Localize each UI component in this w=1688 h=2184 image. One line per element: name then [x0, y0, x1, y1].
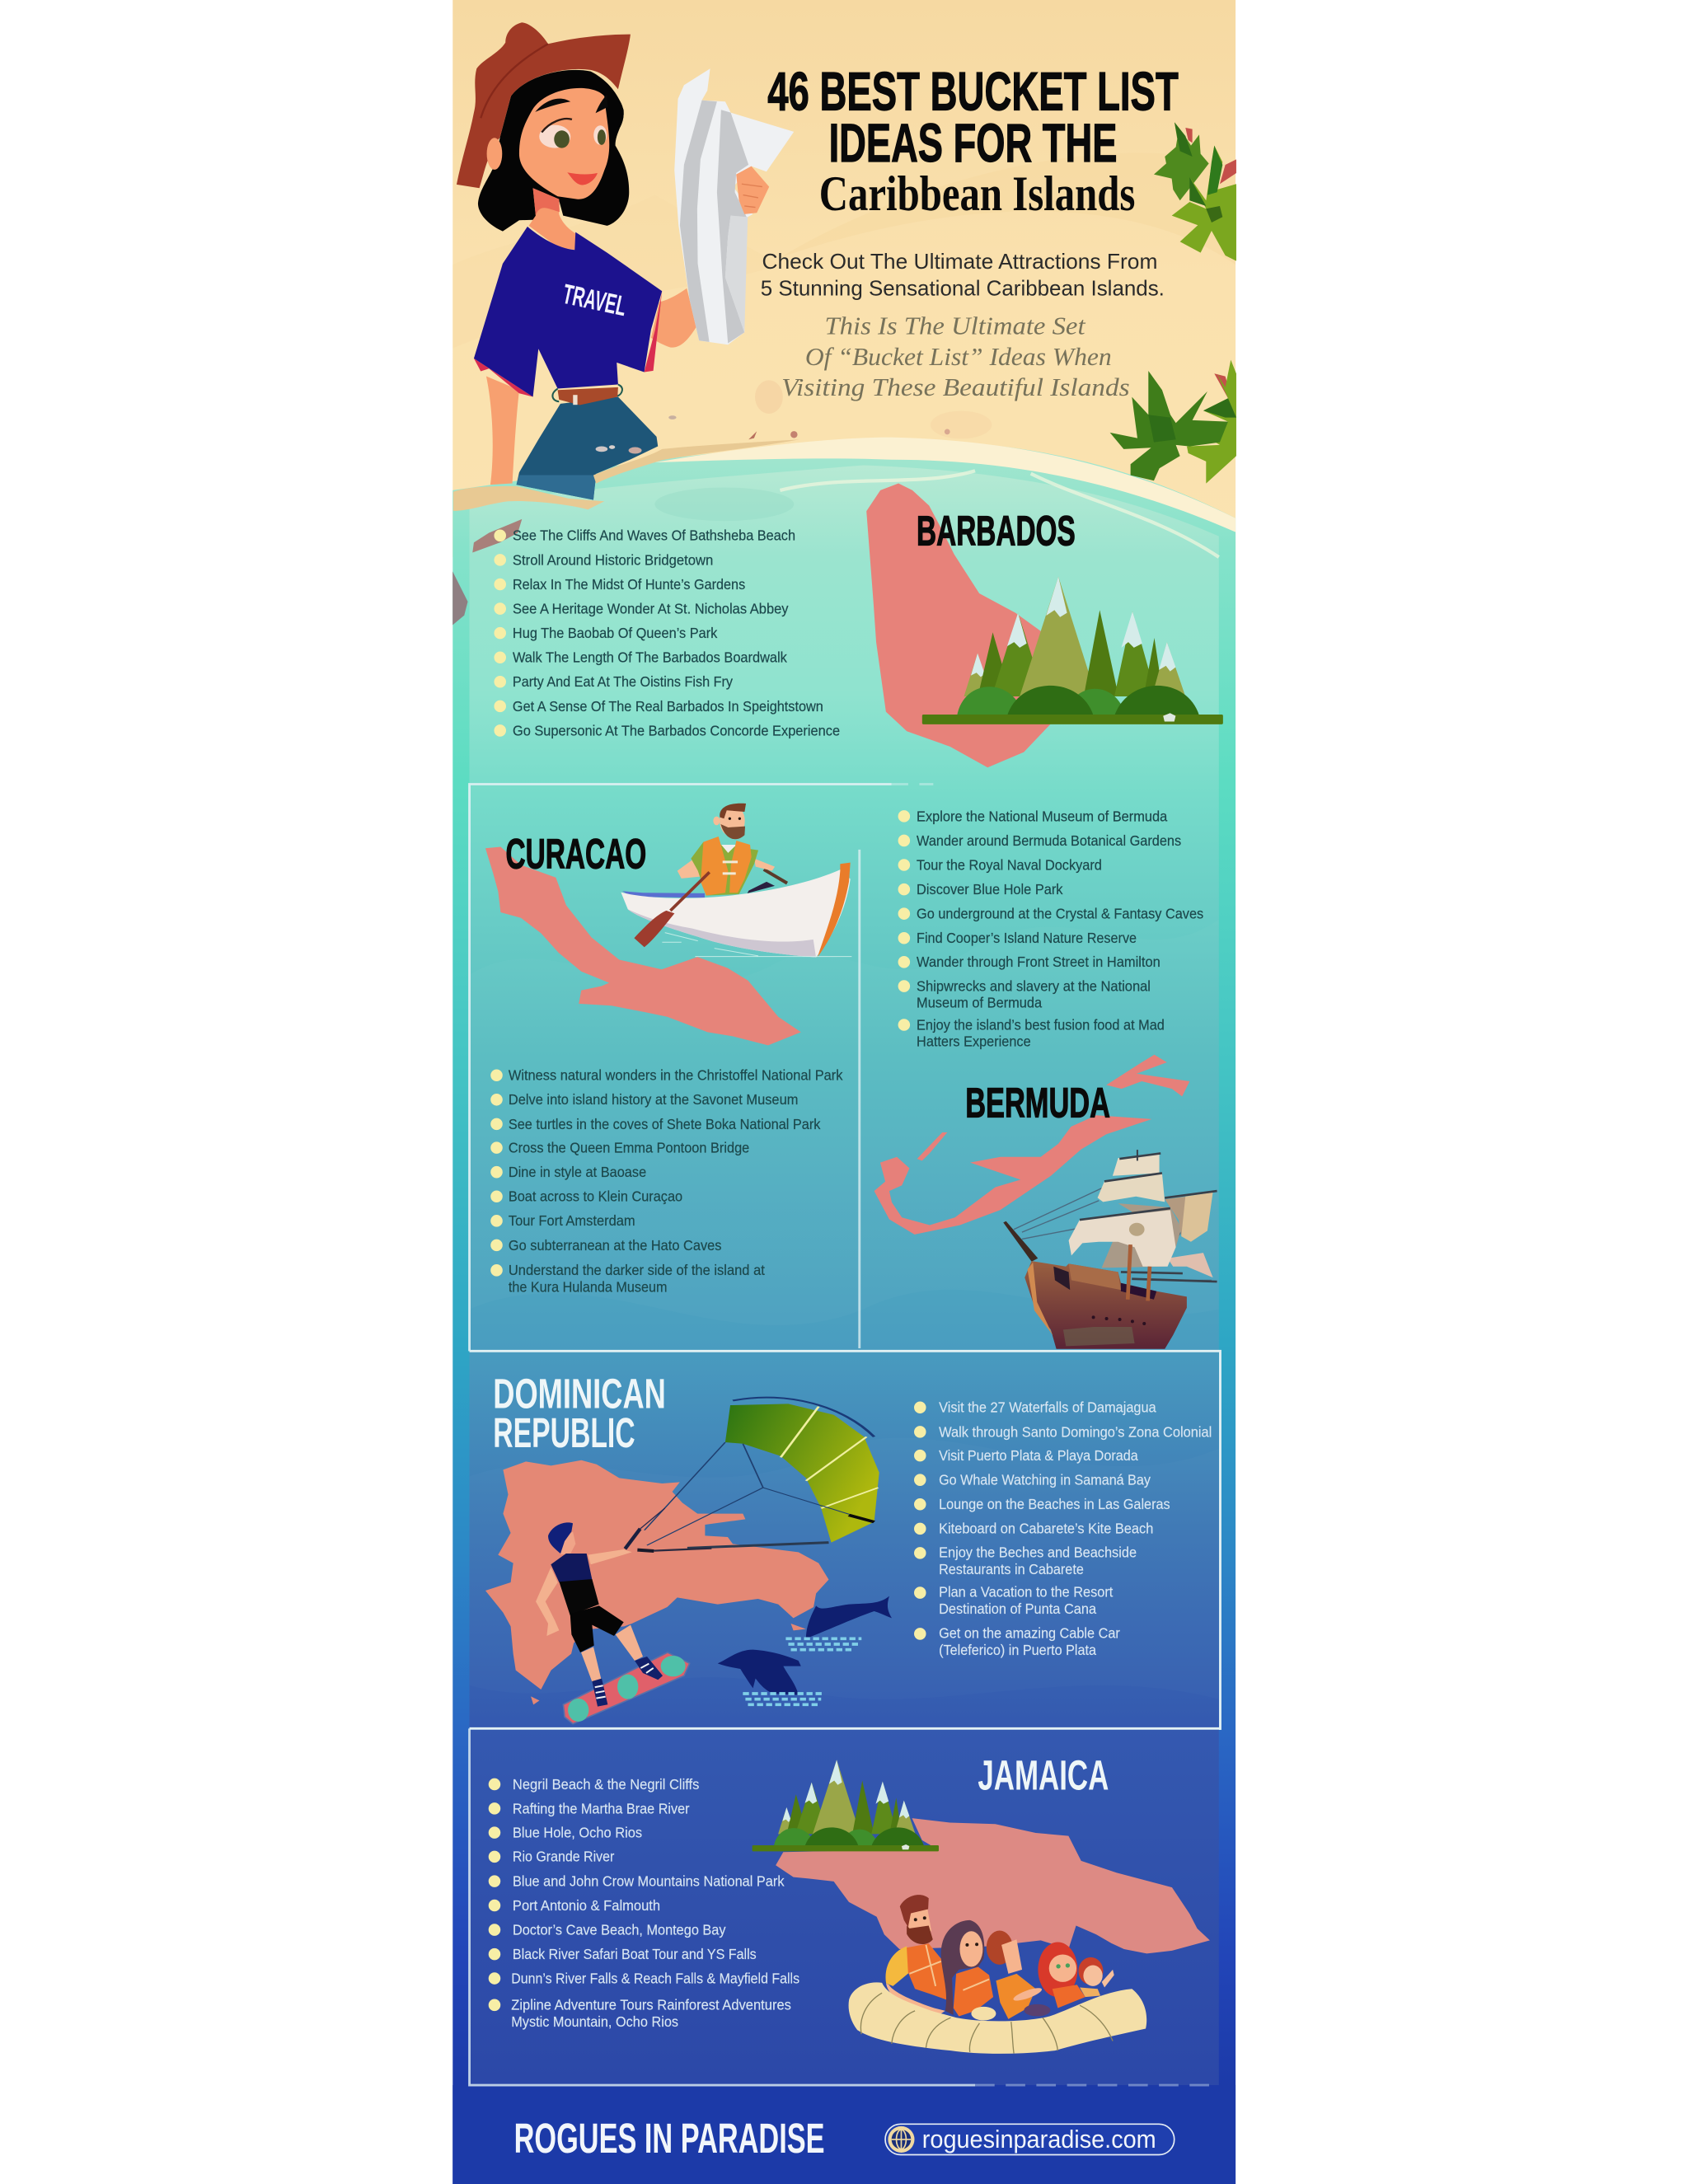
list: Curacao attractions: Witness natural wonders in the Christoffel National Park [509, 1067, 843, 1084]
skirt [517, 397, 658, 500]
list: Curacao attractions: Go subterranean at the Hato Caves [509, 1237, 722, 1254]
list: Curacao attractions: See turtles in the coves of Shete Boka National Park [509, 1116, 821, 1132]
sleeve linings [474, 359, 533, 397]
woman traveller illustration [457, 22, 794, 500]
list: Barbados attractions [494, 527, 840, 738]
icon: globe [888, 2126, 915, 2153]
heading: Barbados: BARBADOS [917, 508, 1076, 555]
hull [621, 869, 851, 958]
list: Barbados attractions: Hug The Baobab Of Queen’s Park [513, 625, 717, 641]
bowsprit [1003, 1221, 1038, 1262]
heading: Curacao: CURACAO [505, 831, 646, 878]
palm leaves: lower right [1110, 360, 1236, 484]
list: Bermuda attractions: Explore the National Museum of Bermuda [917, 808, 1167, 824]
list: Jamaica attractions: Rio Grande River [513, 1849, 614, 1865]
belt [558, 387, 618, 405]
list: Jamaica attractions: Mystic Mountain, Ocho Rios [511, 2013, 678, 2030]
handwritten tagline: Of “Bucket List” Ideas When [805, 343, 1112, 371]
rock at left edge [452, 571, 468, 625]
list: Bermuda attractions: Wander through Front Street in Hamilton [917, 954, 1160, 970]
panel background [452, 0, 1236, 2184]
board [563, 1652, 690, 1724]
map: Barbados [866, 483, 1050, 767]
raft [849, 1982, 1146, 2054]
kite [645, 1398, 879, 1548]
rear sails [1102, 1203, 1181, 1268]
list: Barbados attractions: Party And Eat At The Oistins Fish Fry [513, 673, 733, 690]
list: Barbados attractions: Go Supersonic At The Barbados Concorde Experience [513, 722, 840, 738]
title: Caribbean Islands [819, 166, 1135, 222]
shirt label: TRAVEL [560, 279, 629, 322]
water lines [662, 933, 851, 957]
subtitle: Check Out The Ultimate Attractions From [762, 249, 1157, 274]
masts [1128, 1244, 1150, 1301]
arms [588, 1549, 632, 1564]
list: Dominican Republic attractions: Plan a Vacation to the Resort [939, 1584, 1113, 1601]
rigging [1014, 1188, 1212, 1280]
shoes [592, 1679, 607, 1707]
list: Jamaica attractions: Negril Beach & the Negril Cliffs [513, 1776, 700, 1793]
list: Dominican Republic attractions: Enjoy the Beches and Beachside [939, 1544, 1137, 1560]
list: Curacao attractions [490, 1067, 843, 1296]
list: Barbados attractions: Get A Sense Of The Real Barbados In Speightstown [513, 698, 823, 715]
footer website pill: roguesinparadise.com [922, 2125, 1156, 2154]
title: 46 BEST BUCKET LIST [767, 61, 1179, 122]
hand [736, 166, 769, 214]
list: Curacao attractions: the Kura Hulanda Museum [509, 1279, 668, 1296]
list: Jamaica attractions: Zipline Adventure Tours Rainforest Adventures [511, 1997, 791, 2013]
neck [529, 188, 575, 250]
list: Barbados attractions: Stroll Around Historic Bridgetown [513, 551, 713, 568]
list: Bermuda attractions: Enjoy the island’s best fusion food at Mad [917, 1016, 1165, 1033]
dolphins [718, 1596, 892, 1704]
subtitle: 5 Stunning Sensational Caribbean Islands. [761, 275, 1165, 300]
list: Dominican Republic attractions: Kiteboard on Cabarete’s Kite Beach [939, 1521, 1153, 1537]
hull [1025, 1261, 1187, 1349]
list: Barbados attractions: See The Cliffs And Waves Of Bathsheba Beach [513, 527, 795, 544]
list: Bermuda attractions: Go underground at the Crystal & Fantasy Caves [917, 906, 1203, 922]
top sails [1113, 1154, 1160, 1176]
arms [678, 860, 719, 879]
boy [987, 1931, 1013, 1965]
list: Bermuda attractions [898, 808, 1203, 1050]
face [519, 88, 609, 199]
section frames [470, 784, 1220, 2085]
rocks left of Barbados list [472, 519, 522, 553]
paddle [670, 872, 710, 911]
list: Dominican Republic attractions [914, 1399, 1212, 1658]
list: Dominican Republic attractions: Visit Puerto Plata & Playa Dorada [939, 1447, 1138, 1464]
list: Jamaica attractions: Blue Hole, Ocho Rios [513, 1825, 642, 1841]
mountains: Jamaica [753, 1760, 939, 1851]
list: Jamaica attractions: Blue and John Crow Mountains National Park [513, 1872, 785, 1889]
list: Jamaica attractions: Doctor’s Cave Beach, Montego Bay [513, 1921, 726, 1938]
handwritten tagline: This Is The Ultimate Set [825, 312, 1086, 340]
map: Bermuda [874, 1055, 1189, 1235]
list: Jamaica attractions: Rafting the Martha Brae River [513, 1800, 690, 1816]
wet sand shoreline [453, 415, 799, 511]
heading: Bermuda: BERMUDA [965, 1079, 1110, 1126]
list: Curacao attractions: Dine in style at Baoase [509, 1164, 646, 1180]
title: IDEAS FOR THE [829, 112, 1117, 173]
list: Dominican Republic attractions: Lounge on the Beaches in Las Galeras [939, 1496, 1170, 1512]
list: Curacao attractions: Understand the darker side of the island at [509, 1262, 765, 1278]
list: Dominican Republic attractions: Visit the 27 Waterfalls of Damajagua [939, 1399, 1156, 1416]
title [767, 61, 1179, 222]
list: Bermuda attractions: Discover Blue Hole Park [917, 881, 1063, 898]
hat [457, 22, 631, 188]
map: Curacao [485, 847, 801, 1045]
list: Curacao attractions: Boat across to Klein Curaçao [509, 1188, 682, 1205]
list: Jamaica attractions: Dunn’s River Falls & Reach Falls & Mayfield Falls [511, 1970, 799, 1986]
mountains: Barbados [922, 577, 1223, 724]
list: Bermuda attractions: Shipwrecks and slavery at the National [917, 977, 1151, 994]
left arm [486, 377, 519, 485]
life vest [701, 837, 728, 896]
gun ports [1092, 1315, 1095, 1319]
list: Bermuda attractions: Wander around Bermuda Botanical Gardens [917, 832, 1181, 849]
list: Jamaica attractions: Black River Safari Boat Tour and YS Falls [513, 1946, 757, 1962]
list: Dominican Republic attractions: Get on the amazing Cable Car [939, 1624, 1120, 1641]
list: Curacao attractions: Delve into island history at the Savonet Museum [509, 1091, 798, 1108]
list: Curacao attractions: Cross the Queen Emma Pontoon Bridge [509, 1140, 749, 1156]
mom [941, 1920, 984, 2015]
rear oar [764, 869, 787, 883]
sailing ship [1003, 1150, 1217, 1349]
map: Jamaica [776, 1818, 1210, 1953]
ear [487, 138, 502, 170]
list: Dominican Republic attractions: Walk through Santo Domingo’s Zona Colonial [939, 1423, 1212, 1440]
subtitle [761, 249, 1165, 300]
list: Barbados attractions: Relax In The Midst Of Hunte’s Gardens [513, 576, 745, 593]
toddler [1078, 1957, 1103, 1985]
mouth [567, 172, 598, 185]
right arm [651, 288, 696, 348]
rafting family [849, 1895, 1146, 2054]
handwritten tagline [781, 312, 1130, 401]
list: Barbados attractions: See A Heritage Wonder At St. Nicholas Abbey [513, 600, 789, 616]
list: Dominican Republic attractions: Restaurants in Cabarete [939, 1561, 1084, 1577]
eyes [539, 125, 570, 148]
hair [478, 70, 629, 232]
kiteboarder [536, 1508, 711, 1724]
main sail [1069, 1210, 1176, 1267]
handwritten tagline: Visiting These Beautiful Islands [781, 373, 1130, 401]
heading: Dominican Republic: DOMINICAN [493, 1371, 666, 1418]
list: Bermuda attractions: Museum of Bermuda [917, 994, 1042, 1010]
list: Jamaica attractions [489, 1776, 799, 2030]
shirt [691, 842, 758, 896]
heading: Dominican Republic: REPUBLIC [493, 1409, 635, 1456]
girl [1038, 1943, 1077, 1997]
rowboat with man [621, 804, 851, 958]
neck and head [560, 1531, 575, 1554]
list: Bermuda attractions: Hatters Experience [917, 1033, 1031, 1050]
list: Dominican Republic attractions: (Teleferico) in Puerto Plata [939, 1642, 1096, 1658]
heading: Jamaica: JAMAICA [978, 1752, 1109, 1799]
shirt [474, 227, 662, 397]
wetsuit [551, 1554, 592, 1582]
list: Dominican Republic attractions: Destination of Punta Cana [939, 1601, 1096, 1617]
footer brand name: ROGUES IN PARADISE [514, 2115, 825, 2162]
list: Bermuda attractions: Find Cooper’s Island Nature Reserve [917, 930, 1137, 946]
head [713, 817, 720, 825]
list: Jamaica attractions: Port Antonio & Falmouth [513, 1897, 660, 1914]
palm leaves: top right [1154, 122, 1236, 261]
list: Bermuda attractions: Tour the Royal Naval Dockyard [917, 856, 1102, 873]
list: Curacao attractions: Tour Fort Amsterdam [509, 1212, 635, 1229]
map: Dominican Republic [485, 1460, 828, 1704]
list: Dominican Republic attractions: Go Whale Watching in Samaná Bay [939, 1472, 1151, 1488]
list: Barbados attractions: Walk The Length Of The Barbados Boardwalk [513, 649, 787, 666]
dad [885, 1947, 909, 1986]
handle and bar [625, 1529, 640, 1549]
map paper [674, 68, 794, 344]
legs [581, 1647, 601, 1682]
spars [1080, 1153, 1217, 1282]
seat and legs [748, 882, 775, 893]
heading: Dominican Republic [493, 1371, 666, 1456]
